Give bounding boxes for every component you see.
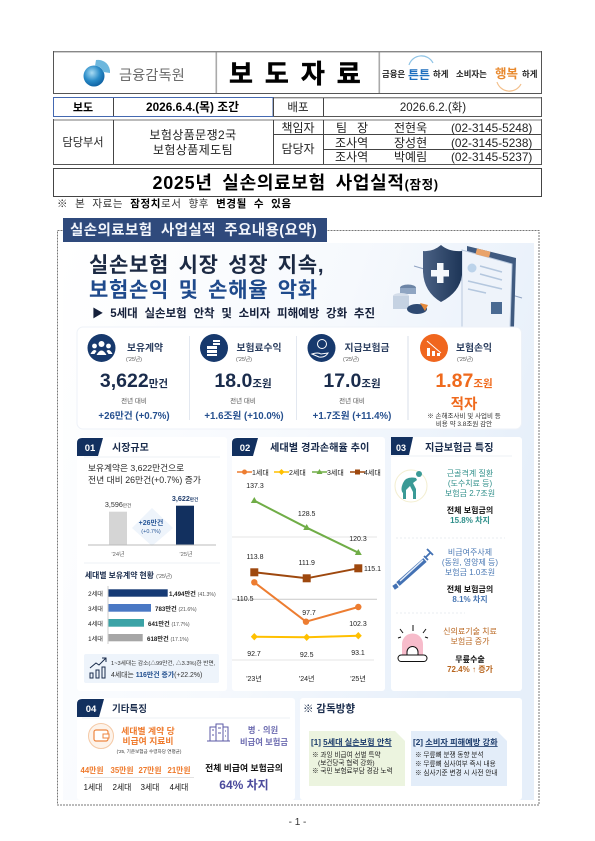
series: 2nd generation (247, 632, 365, 659)
series: 2nd generation: 92.7 (247, 651, 261, 658)
page number: - 1 - (289, 817, 306, 828)
stat: premium income (200, 334, 284, 422)
panel 03: paid insurance features (391, 437, 522, 691)
contact table: 책임자 (281, 120, 315, 135)
stat: insurance loss (420, 334, 501, 428)
hero illustration: shield and clipboard (393, 245, 522, 327)
series: 1st generation (236, 579, 367, 628)
contact table: 보험상품문쟁2국 (149, 128, 237, 142)
heading: 지급보험금 특징 (425, 441, 493, 454)
series: 4th generation: 113.8 (246, 554, 264, 561)
bar chart: contracts by year: (+0.7%) (141, 529, 161, 535)
stat: insurance paid: ('25년) (343, 355, 359, 363)
feature: non-covered injection: 8.1% 차지 (452, 594, 488, 604)
hero heading: 실손보험 시장 성장 지속, (89, 254, 324, 277)
card: 5th generation: ※ 과잉 비급여 선별 특약 (312, 750, 381, 759)
stat: contracts held: +26만건 (+0.7%) (98, 410, 170, 422)
heading: 기타특징 (112, 703, 147, 715)
contact table (54, 119, 542, 164)
bar chart: contracts by year: 3,622만건 (172, 494, 198, 503)
stat: contracts held (88, 334, 170, 422)
contact table: 박예림 (394, 150, 427, 164)
hospital non-covered share: 비급여 보험금 (240, 737, 288, 747)
non-covered claims by generation: 세대별 계약 당 (121, 725, 175, 736)
hero heading (89, 254, 375, 320)
bar chart: contracts by year: +26만건 (139, 518, 163, 527)
line chart: loss ratio by generation: '24년 (299, 674, 314, 683)
note: provisional figures: ※ 본 자료는 잠정치로서 향후 변경될 수 있음 (57, 197, 292, 210)
section tag 04 (77, 699, 104, 717)
section tag 01 (77, 438, 103, 456)
series: 1st generation: 97.7 (302, 610, 316, 617)
stat: insurance paid: 17.0조원 (323, 370, 381, 392)
panel: key stats (77, 327, 522, 429)
non-covered claims by generation: 35만원 (110, 765, 134, 775)
contact table: 보험상품제도팀 (153, 143, 233, 157)
hospital non-covered share: 병 · 의원 (248, 725, 278, 735)
logo: financial supervisory service (84, 60, 185, 86)
series: 1st generation: 110.5 (236, 596, 254, 603)
section tag 03: 03 (396, 443, 406, 453)
card: 5th generation: (보건당국 협력 강화) (318, 758, 375, 767)
slogan: 튼튼 (408, 68, 430, 82)
contact table: 담당부서 (62, 136, 104, 149)
line chart: loss ratio by generation: '23년 (246, 674, 262, 683)
callout: generation trend: 1~3세대는 감소(△99만건, △3.3%)한 반면, (111, 659, 216, 667)
summary text: 전년 대비 26만건(+0.7%) 증가 (88, 475, 201, 485)
contact table: (02-3145-5237) (451, 150, 532, 164)
feature: musculoskeletal (395, 468, 495, 525)
panel 02: loss ratio trend (232, 437, 385, 691)
hero heading: 보험손익 및 손해율 악화 (89, 279, 318, 302)
slogan (382, 56, 538, 91)
bar chart: contracts by generation: 4세대 (88, 620, 103, 628)
stat: insurance loss: 적자 (451, 396, 478, 413)
stat: premium income: +1.6조원 (+10.0%) (204, 409, 284, 422)
non-covered claims by generation: 1세대 (84, 783, 102, 792)
card: consumer protection (411, 731, 507, 786)
series: 3rd generation: 128.5 (298, 511, 316, 518)
bar chart: contracts by year: 3,596만건 (105, 500, 131, 509)
bar chart: contracts by year: '24년 (112, 550, 124, 558)
stat: premium income: ('25년) (236, 355, 252, 363)
hero background (63, 243, 534, 800)
icon: building (207, 724, 230, 741)
feature: non-covered injection: 전체 보험금의 (447, 584, 493, 594)
icon: falling chart (420, 334, 448, 362)
stat: contracts held: 3,622만건 (100, 370, 168, 392)
stat: insurance loss: 보험손익 (456, 341, 492, 354)
section tag 03 (391, 437, 413, 455)
heading: ※ 감독방향 (303, 702, 355, 715)
bar chart: contracts by year (88, 494, 216, 558)
stat: premium income: 전년 대비 (230, 396, 256, 405)
release date table (54, 97, 542, 116)
legend (237, 468, 381, 477)
slogan: 행복 (495, 66, 518, 81)
section tag 01: 01 (85, 443, 96, 454)
section tag 04: 04 (86, 704, 97, 715)
series: 1st generation: 102.3 (349, 621, 367, 628)
callout: generation trend: 4세대는 116만건 증가(+22.2%) (111, 670, 202, 679)
feature: new medical technology: 보험금 증가 (450, 637, 490, 646)
icon: people (88, 334, 116, 362)
stat: premium income: 보험료수익 (236, 341, 282, 354)
summary text (88, 462, 201, 485)
contact table: 장성현 (394, 136, 427, 150)
bar chart: contracts by generation: 세대별 보유계약 현황 ('25년) (85, 570, 172, 580)
bar chart: contracts by generation: 1세대 (88, 635, 103, 643)
callout: generation trend (84, 654, 219, 683)
non-covered claims by generation: 2세대 (113, 783, 131, 792)
contact table: 담당자 (281, 142, 315, 156)
contact table: 조사역 (335, 136, 368, 150)
contact table: (02-3145-5248) (451, 121, 532, 135)
feature: non-covered injection: 보험금 1.0조원 (445, 568, 495, 577)
contact table: (02-3145-5238) (451, 136, 532, 150)
heading: 세대별 경과손해율 추이 (270, 441, 369, 454)
release date table: 배포 (287, 101, 309, 114)
legend: 1세대 (252, 468, 269, 477)
title: 2025년 실손의료보험 사업실적(잠정) (152, 173, 439, 193)
banner: summary heading (63, 218, 327, 242)
section tag 02: 02 (240, 443, 250, 454)
series: 3rd generation: 137.3 (246, 483, 264, 490)
feature: musculoskeletal: (도수치료 등) (448, 479, 493, 488)
icon: coins (200, 334, 228, 362)
stat: contracts held: ('25년) (126, 355, 142, 363)
slogan: 소비자는 (456, 69, 487, 79)
icon: hand with won coin (308, 334, 336, 362)
hospital non-covered share: 전체 비급여 보험금의 (205, 762, 283, 773)
release date table: 2026.6.4.(목) 조간 (146, 100, 239, 114)
bar chart: contracts by generation: 783만건 (21.6%) (155, 605, 197, 613)
stat: premium income: 18.0조원 (214, 370, 272, 392)
feature: musculoskeletal: 15.8% 차지 (450, 515, 490, 525)
heading: 시장규모 (112, 442, 149, 454)
panel: infographic frame (58, 230, 539, 805)
legend: 2세대 (289, 468, 306, 477)
non-covered claims by generation: 3세대 (141, 783, 159, 792)
series: 3rd generation: 120.3 (349, 536, 367, 543)
bar chart: contracts by generation: 1,494만건 (41.3%) (169, 590, 216, 598)
hero heading: ▶ 5세대 실손보험 안착 및 소비자 피해예방 강화 추진 (92, 306, 375, 320)
feature: new medical technology: 72.4% ↑ 증가 (447, 664, 494, 674)
non-covered claims by generation (80, 724, 194, 792)
feature: musculoskeletal: 전체 보험금의 (447, 505, 493, 515)
slogan: 하게 (433, 69, 449, 79)
feature: musculoskeletal: 보험금 2.7조원 (445, 489, 495, 498)
bar chart: contracts by generation: 618만건 (17.1%) (147, 635, 189, 643)
card: consumer protection: ※ 심사기준 변경 시 사전 안내 (415, 768, 497, 777)
bar chart: contracts by generation: 641만건 (17.7%) (148, 620, 190, 628)
series: 2nd generation: 93.1 (351, 650, 365, 657)
hospital non-covered share (205, 724, 288, 792)
card: consumer protection: ※ 무릎뼈 심사여부 즉시 내용 (415, 759, 496, 768)
series: 3rd generation (246, 483, 367, 555)
bar chart: contracts by generation (85, 570, 216, 644)
icon: back pain (395, 470, 427, 502)
stat: insurance loss: ('25년) (457, 355, 473, 363)
bar chart: contracts by generation: 3세대 (88, 605, 103, 613)
stat: insurance paid: 지급보험금 (344, 341, 390, 354)
stat: insurance loss: 비용 약 3.8조원 감안 (436, 419, 492, 428)
stat: insurance paid: 전년 대비 (339, 396, 365, 405)
series: 4th generation: 115.1 (364, 566, 381, 573)
icon: alarm siren (398, 625, 428, 662)
line chart: loss ratio by generation (232, 468, 381, 683)
line chart: loss ratio by generation: '25년 (350, 674, 366, 683)
header box (54, 51, 542, 94)
icon: wallet (88, 724, 114, 748)
bar chart: contracts by year: '25년 (180, 550, 192, 558)
card: consumer protection: ※ 무릎뼈 분쟁 동향 분석 (415, 750, 484, 759)
heading: press release: 보도자료 (229, 59, 373, 89)
hospital non-covered share: 64% 차지 (219, 778, 269, 792)
contact table: 팀 장 (336, 121, 368, 135)
logo: financial supervisory service: 금융감독원 (119, 67, 185, 84)
non-covered claims by generation: 21만원 (167, 765, 191, 775)
non-covered claims by generation: 비급여 지료비 (122, 735, 174, 746)
section tag 02 (232, 438, 258, 456)
feature: non-covered injection (393, 547, 498, 604)
stat: insurance loss: ※ 손해조사비 및 사업비 등 (427, 411, 501, 420)
feature: new medical technology: 무릎수술 (455, 654, 485, 664)
series: 4th generation: 111.9 (298, 560, 315, 567)
release date table: 보도 (73, 101, 93, 114)
series: 2nd generation: 92.5 (300, 652, 314, 659)
non-covered claims by generation: ('25, 기준보험금 수령자당 연평균) (117, 748, 182, 755)
stat: insurance paid (308, 334, 391, 422)
series: 4th generation (246, 554, 381, 582)
non-covered claims by generation: 44만원 (80, 765, 104, 775)
feature: non-covered injection: (동원, 영양제 등) (442, 557, 498, 567)
release date table: 2026.6.2.(화) (400, 101, 466, 114)
legend: 3세대 (327, 468, 344, 477)
feature: new medical technology: 신의료기술 치료 (443, 626, 497, 636)
card: 5th generation (309, 731, 405, 786)
card: consumer protection: [2] 소비자 피해예방 강화 (413, 737, 498, 747)
icon: syringe (393, 549, 433, 589)
contact table: 조사역 (335, 150, 368, 164)
feature: non-covered injection: 비급여주사제 (448, 547, 492, 557)
stat: contracts held: 보유계약 (127, 341, 163, 354)
contact table: 전현욱 (394, 121, 427, 135)
legend: 4세대 (364, 468, 381, 477)
slogan: 하게 (522, 69, 538, 79)
bar chart: contracts by generation: 2세대 (88, 590, 103, 598)
non-covered claims by generation: 27만원 (138, 765, 162, 775)
banner: summary heading: 실손의료보험 사업실적 주요내용(요약) (70, 222, 317, 239)
stat: insurance paid: +1.7조원 (+11.4%) (313, 409, 391, 422)
stat: contracts held: 전년 대비 (121, 396, 147, 405)
card: 5th generation: [1] 5세대 실손보험 안착 (311, 737, 392, 747)
feature: new medical technology (398, 625, 497, 674)
stat: insurance loss: 1.87조원 (435, 370, 493, 392)
title (54, 168, 542, 196)
summary text: 보유계약은 3,622만건으로 (88, 462, 184, 473)
slogan: 금융은 (382, 69, 405, 79)
panel 04: other features (77, 698, 295, 800)
feature: musculoskeletal: 근골격계 질환 (447, 468, 494, 478)
icon: growth chart (90, 658, 106, 678)
card: 5th generation: ※ 국민 보험료부담 경감 노력 (312, 766, 393, 775)
panel: supervision direction (300, 698, 522, 800)
non-covered claims by generation: 4세대 (170, 783, 188, 792)
panel 01: market size (77, 437, 227, 691)
